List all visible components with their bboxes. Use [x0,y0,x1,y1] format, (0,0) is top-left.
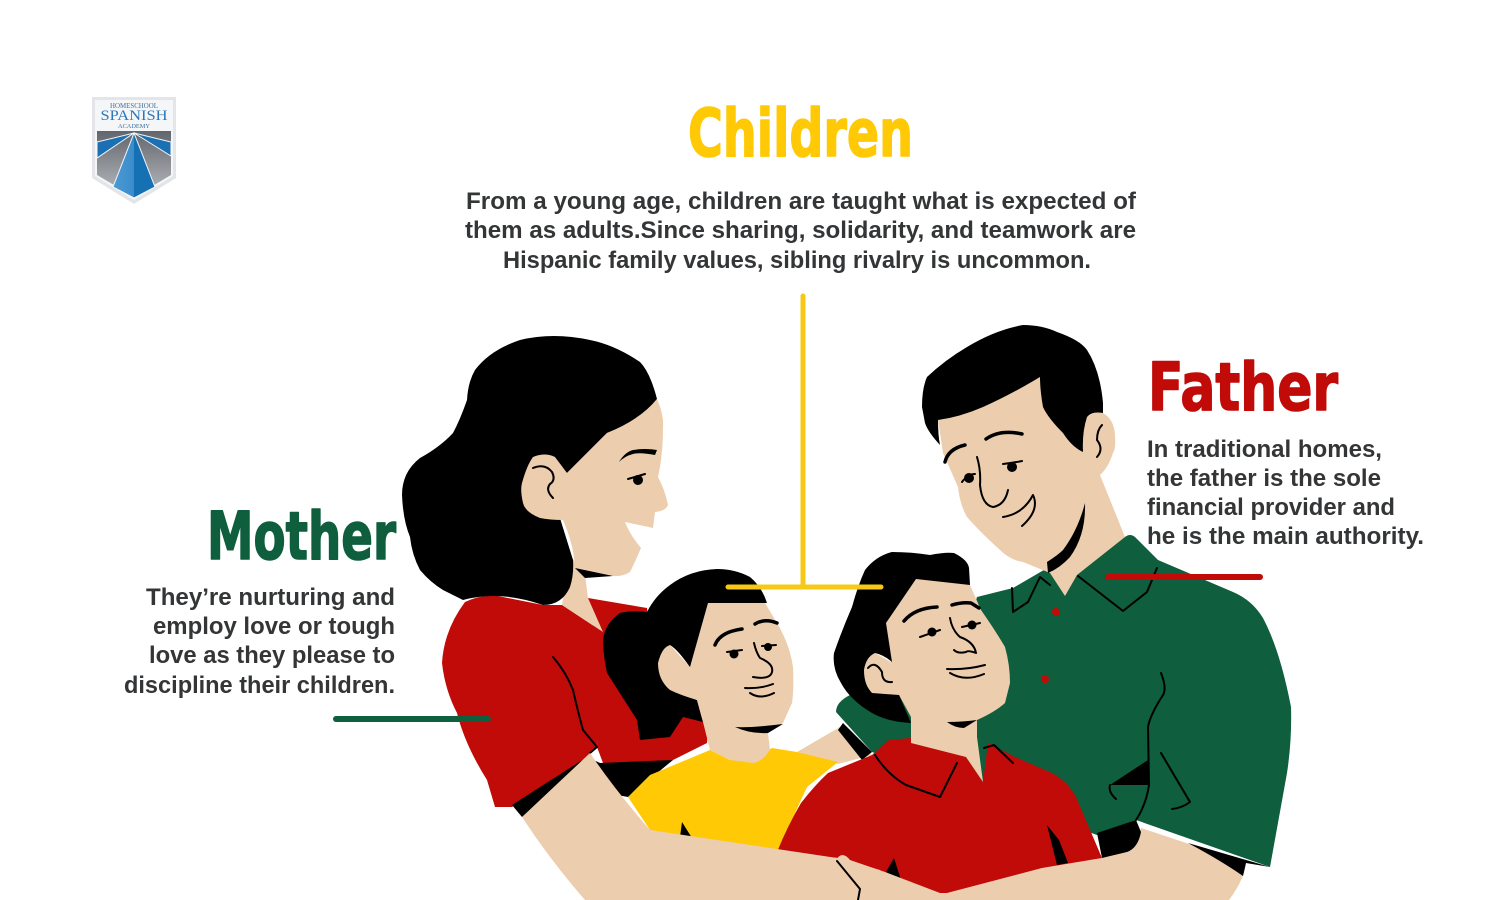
text block: Children description: them as adults.Since sharing, solidarity, and teamwork are [465,217,1136,244]
boy: red shirt [777,738,1102,893]
text block: Children description: From a young age, children are taught what is expected of [466,188,1137,215]
logo: Homeschool Spanish Academy shield [92,97,176,204]
mother: neck [562,555,603,632]
text block: Mother description [124,584,395,699]
boy: head [834,552,1010,782]
text block: Father description: In traditional homes, [1147,436,1382,463]
father: forearm [700,828,1246,900]
connector line: father [1108,574,1260,580]
mother: hair [402,336,657,605]
mother: dark shadow under sleeve [512,757,673,817]
text block: Mother description: They’re nurturing and [146,584,395,611]
mother: shirt [442,595,708,807]
heading: Mother: Mother [207,498,396,575]
text block: Father description: he is the main authority. [1147,523,1424,550]
girl: yellow t-shirt [628,748,838,852]
connector line: children [728,296,881,587]
father: head and neck [922,325,1125,596]
mother: arm and hand [522,753,940,900]
illustration: family embracing [402,325,1291,900]
text block: Mother description: discipline their children. [124,672,395,699]
text block: Children description: Hispanic family values, sibling rivalry is uncommon. [503,247,1091,274]
mother: face [521,399,668,578]
text block: Children description [465,188,1137,274]
connector line: mother [336,716,488,722]
text block: Mother description: employ love or tough [153,613,395,640]
text block: Father description: financial provider and [1147,494,1395,521]
father: collar, buttons and sleeve folds [1012,568,1190,820]
text block: Father description: the father is the sole [1147,465,1381,492]
heading: Children: Children [688,95,913,172]
text block: Father description [1147,436,1424,550]
logo: Homeschool Spanish Academy shield: ACADEMY [118,124,151,130]
father: black shadows under shirt [1097,820,1270,876]
text block: Mother description: love as they please to [149,642,395,669]
father: shirt [836,535,1291,867]
father: arm behind the children [797,727,872,764]
heading: Father: Father [1148,349,1338,426]
girl: ponytail and head [603,569,793,763]
father: black shadow at left sleeve [838,723,872,760]
logo: Homeschool Spanish Academy shield: HOMESCHOOL [110,102,158,110]
logo: Homeschool Spanish Academy shield: SPANISH [100,108,168,124]
